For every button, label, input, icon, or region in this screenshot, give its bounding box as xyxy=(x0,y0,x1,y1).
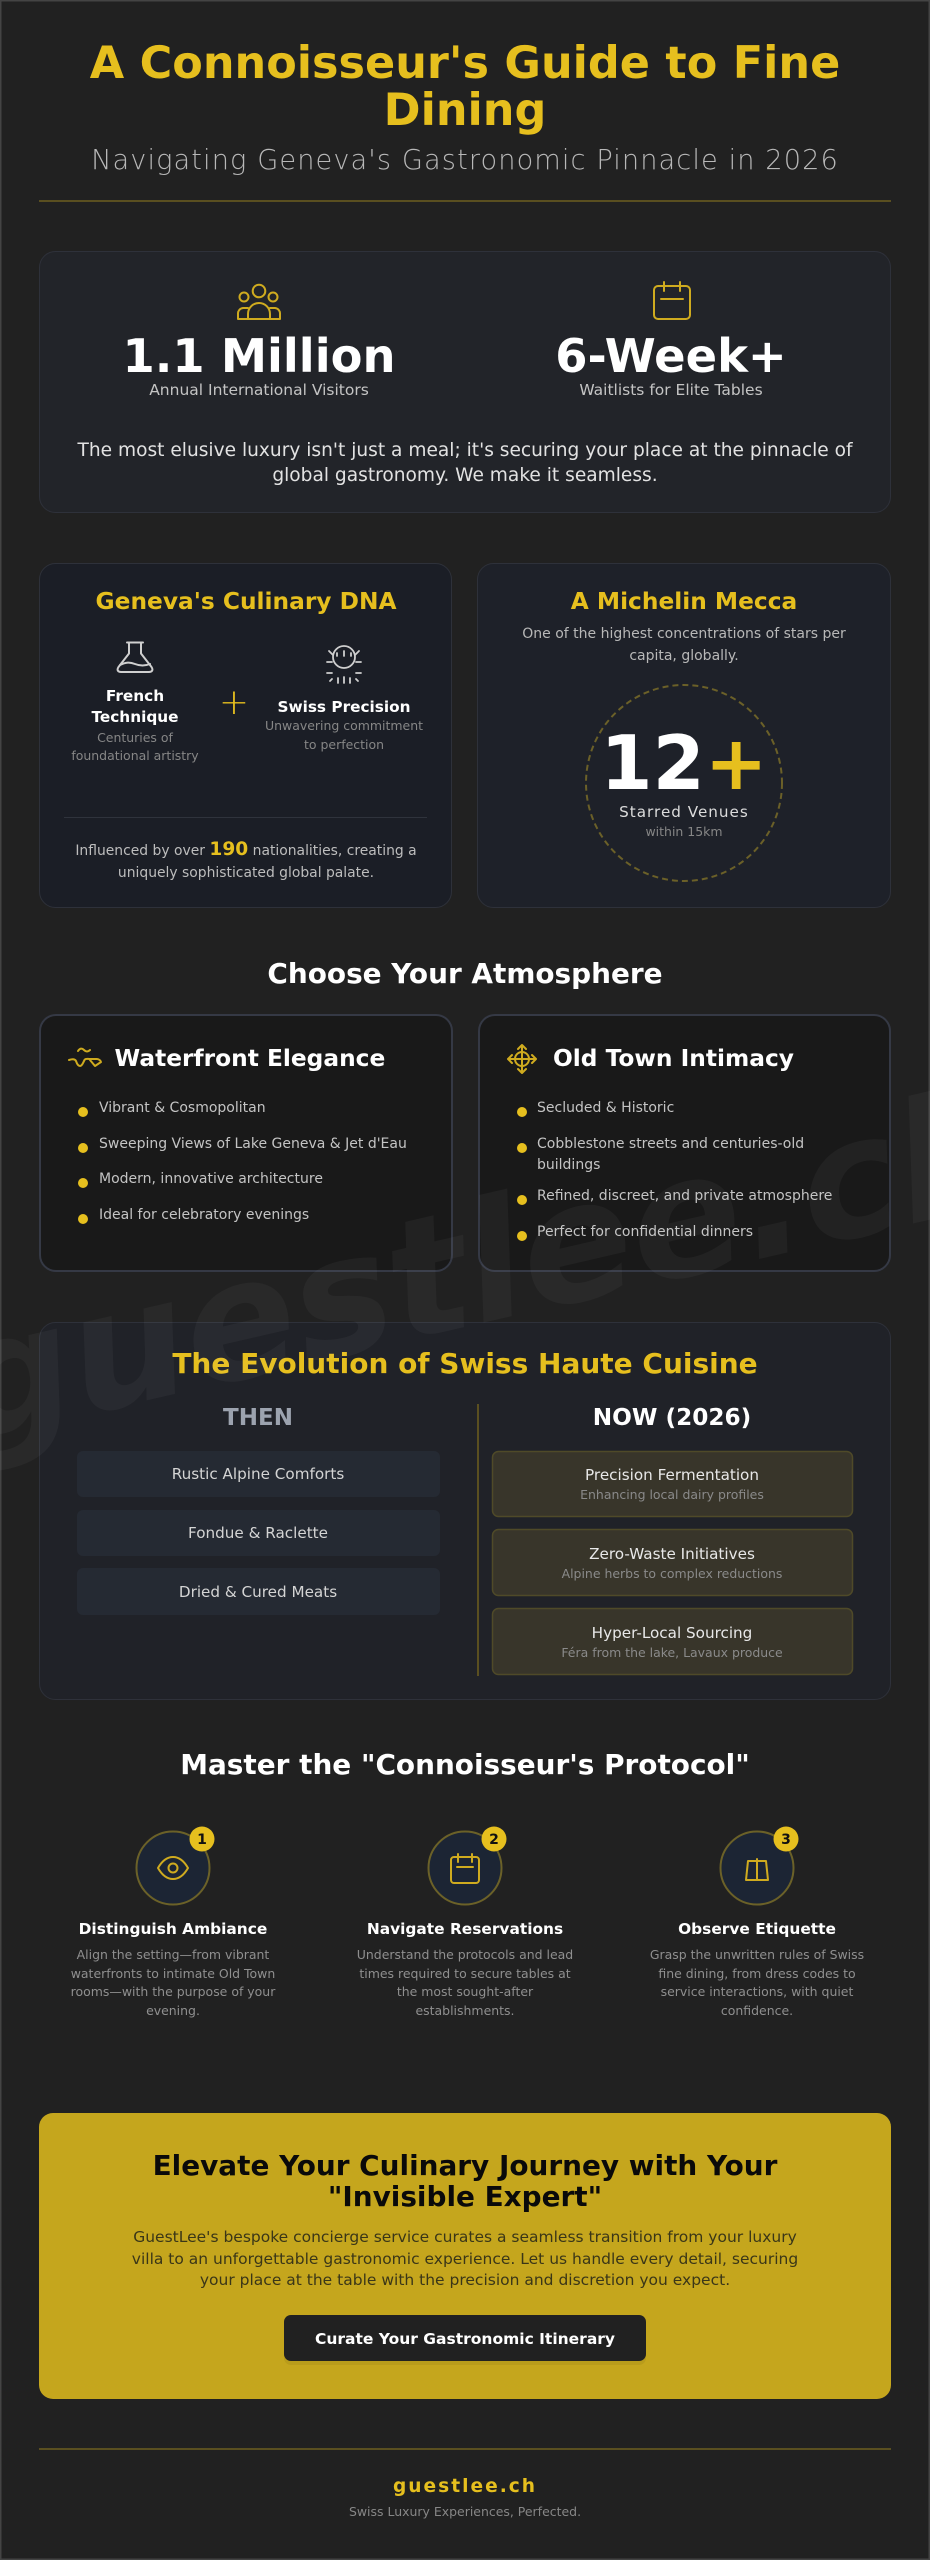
list: Cobblestone streets and centuries-old xyxy=(537,1136,804,1152)
list: Refined, discreet, and private atmosphere xyxy=(537,1188,832,1204)
statistic: visitors: Annual International Visitors xyxy=(149,381,369,399)
step 3: 3 xyxy=(781,1832,791,1848)
French Technique: Technique xyxy=(91,708,179,726)
column: now: Enhancing local dairy profiles xyxy=(580,1487,764,1502)
panel: call to action xyxy=(39,2113,891,2399)
description: capita, globally. xyxy=(629,648,739,664)
Swiss Precision: Swiss Precision xyxy=(277,698,411,716)
French Technique: Centuries of xyxy=(97,730,174,745)
list xyxy=(517,1100,832,1241)
icon: flask xyxy=(118,642,152,672)
French Technique: foundational artistry xyxy=(71,748,199,763)
button xyxy=(284,2315,646,2365)
heading: protocol: Master the "Connoisseur's Protocol" xyxy=(180,1748,750,1781)
statistic: visitors: 1.1 Million xyxy=(122,329,396,383)
column: then: Fondue & Raclette xyxy=(188,1524,328,1542)
column: now: Féra from the lake, Lavaux produce xyxy=(561,1645,783,1660)
dashed circle with stat: Starred Venues xyxy=(619,803,749,821)
step 2: times required to secure tables at xyxy=(359,1966,571,1981)
heading: Geneva's Culinary DNA xyxy=(96,588,396,615)
step 3: Observe Etiquette xyxy=(678,1920,836,1938)
Swiss Precision: Unwavering commitment xyxy=(265,718,423,733)
step 3: service interactions, with quiet xyxy=(661,1984,853,1999)
step 1: waterfronts to intimate Old Town xyxy=(71,1966,275,1981)
title: A Connoisseur's Guide to Fine xyxy=(90,38,840,89)
nationalities note xyxy=(75,839,417,881)
panel: Waterfront Elegance xyxy=(40,1015,452,1271)
body text: villa to an unforgettable gastronomic experience. Let us handle every detail, securing xyxy=(132,2250,798,2268)
panel: Evolution of Swiss Haute Cuisine xyxy=(40,1322,890,1700)
dashed circle with stat xyxy=(586,685,782,881)
dashed circle with stat: within 15km xyxy=(645,824,723,839)
list xyxy=(78,1100,407,1224)
list: Ideal for celebratory evenings xyxy=(99,1207,309,1223)
footer: Swiss Luxury Experiences, Perfected. xyxy=(349,2504,581,2519)
icon: people xyxy=(238,285,280,319)
panel: A Michelin Mecca xyxy=(478,564,890,908)
panel: Old Town Intimacy xyxy=(479,1015,890,1271)
nationalities note: Influenced by over 190 nationalities, creating a xyxy=(75,839,417,860)
heading xyxy=(153,2149,778,2213)
list: Secluded & Historic xyxy=(537,1100,674,1116)
heading: A Michelin Mecca xyxy=(571,588,797,615)
step 1: Align the setting—from vibrant xyxy=(77,1947,269,1962)
step 3: Grasp the unwritten rules of Swiss xyxy=(650,1947,864,1962)
step 2 xyxy=(357,1826,573,2018)
column: now: Alpine herbs to complex reductions xyxy=(562,1566,782,1581)
icon: eye xyxy=(158,1857,188,1879)
column: then xyxy=(77,1405,440,1615)
list: Perfect for confidential dinners xyxy=(537,1224,753,1240)
step 3 xyxy=(650,1826,864,2018)
column: now: NOW (2026) xyxy=(593,1404,751,1431)
step 2: Navigate Reservations xyxy=(367,1920,563,1938)
icon: compass arrows xyxy=(508,1045,536,1073)
plus sign: + xyxy=(219,682,249,723)
list: Modern, innovative architecture xyxy=(99,1171,323,1187)
panel: Geneva's Culinary DNA xyxy=(40,564,452,908)
step 1: evening. xyxy=(146,2003,200,2018)
title: Dining xyxy=(384,85,546,136)
step 2: establishments. xyxy=(415,2003,515,2018)
step 1: rooms—with the purpose of your xyxy=(71,1984,276,1999)
footer: guestlee.ch xyxy=(393,2476,537,2497)
statement: global gastronomy. We make it seamless. xyxy=(272,465,658,486)
statement: The most elusive luxury isn't just a meal; it's securing your place at the pinnacle of xyxy=(76,440,853,461)
heading: The Evolution of Swiss Haute Cuisine xyxy=(172,1347,758,1380)
heading: "Invisible Expert" xyxy=(328,2180,602,2213)
body text xyxy=(132,2228,798,2289)
step 2: Understand the protocols and lead xyxy=(357,1947,573,1962)
Swiss Precision: to perfection xyxy=(304,737,384,752)
icon: book xyxy=(746,1859,768,1880)
description: One of the highest concentrations of stars per xyxy=(522,626,846,642)
icon: sun xyxy=(327,646,361,683)
heading: Elevate Your Culinary Journey with Your xyxy=(153,2149,778,2182)
nationalities note: uniquely sophisticated global palate. xyxy=(118,865,374,881)
column: now xyxy=(492,1404,852,1674)
dashed circle with stat: 12+ xyxy=(600,719,768,807)
step 2: the most sought-after xyxy=(397,1984,534,1999)
column: now: Precision Fermentation xyxy=(585,1466,759,1484)
Swiss Precision xyxy=(265,698,423,752)
French Technique: French xyxy=(106,687,164,705)
statistic: waitlists: 6-Week+ xyxy=(555,329,787,383)
column: then: Dried & Cured Meats xyxy=(179,1583,337,1601)
description xyxy=(522,626,846,664)
column: then: Rustic Alpine Comforts xyxy=(172,1465,344,1483)
title xyxy=(90,38,840,136)
panel: key statistics xyxy=(40,252,890,512)
step 1 xyxy=(71,1826,276,2018)
step 2: 2 xyxy=(489,1832,499,1848)
list: Sweeping Views of Lake Geneva & Jet d'Eau xyxy=(99,1136,407,1152)
icon: waves xyxy=(69,1049,101,1066)
step 3: fine dining, from dress codes to xyxy=(658,1966,856,1981)
card title: Old Town Intimacy xyxy=(553,1045,794,1072)
column: then: THEN xyxy=(223,1405,293,1431)
card title: Waterfront Elegance xyxy=(114,1045,385,1072)
column: now: Zero-Waste Initiatives xyxy=(589,1545,755,1563)
list: buildings xyxy=(537,1157,600,1173)
icon: calendar xyxy=(654,282,690,319)
French Technique xyxy=(71,687,199,763)
list: Vibrant & Cosmopolitan xyxy=(99,1100,266,1116)
statement xyxy=(76,440,853,486)
heading: Choose Your Atmosphere: Choose Your Atmosphere xyxy=(267,957,663,990)
body text: GuestLee's bespoke concierge service curates a seamless transition from your luxury xyxy=(133,2228,797,2246)
header xyxy=(39,38,891,202)
body text: your place at the table with the precision and discretion you expect. xyxy=(200,2271,730,2289)
footer xyxy=(349,2476,581,2519)
icon: calendar xyxy=(451,1854,479,1883)
statistic: waitlists: Waitlists for Elite Tables xyxy=(579,381,763,399)
step 3: confidence. xyxy=(721,2003,793,2018)
step 1: 1 xyxy=(197,1832,207,1848)
column: now: Hyper-Local Sourcing xyxy=(592,1624,752,1642)
subtitle: Navigating Geneva's Gastronomic Pinnacle in 2026 xyxy=(91,145,839,176)
step 1: Distinguish Ambiance xyxy=(79,1920,267,1938)
button: Curate Your Gastronomic Itinerary xyxy=(315,2330,615,2348)
